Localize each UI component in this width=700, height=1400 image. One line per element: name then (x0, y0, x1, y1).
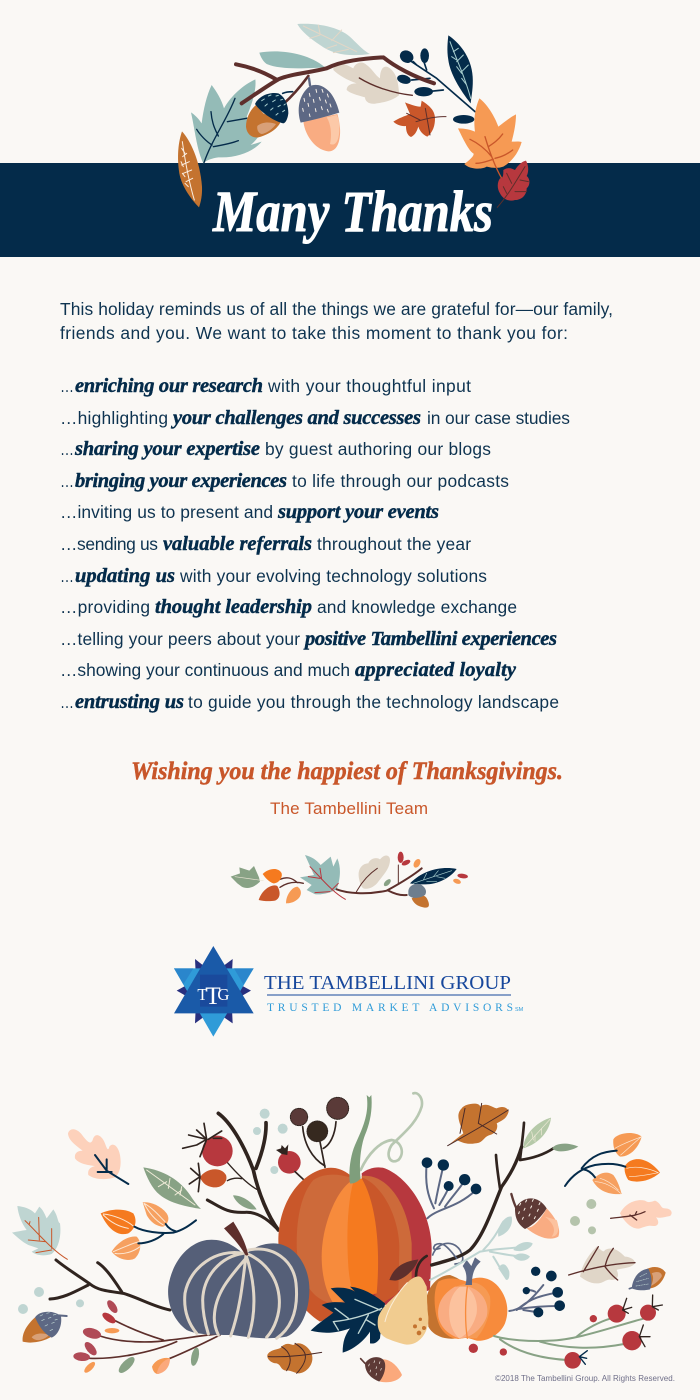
list of thanks: …providing (60, 597, 150, 617)
logo name: THE TAMBELLINI GROUP (264, 972, 511, 994)
signature: The Tambellini Team (270, 799, 428, 818)
list of thanks: in our case studies (427, 408, 570, 428)
list of thanks: to guide you through the technology landscape (188, 692, 559, 712)
list of thanks: to life through our podcasts (292, 471, 509, 491)
logo (174, 946, 524, 1037)
logo star mark: T (197, 985, 208, 1004)
intro text (60, 299, 613, 343)
logo star mark: G (217, 985, 229, 1004)
leaf, pear and small pumpkin (311, 1243, 507, 1353)
logo star mark: T (205, 982, 221, 1010)
title: Many Thanks (212, 179, 493, 244)
logo star mark (174, 946, 254, 1037)
list of thanks: throughout the year (317, 534, 471, 554)
list of thanks: sharing your expertise (74, 438, 260, 460)
small branch divider (231, 852, 468, 908)
list of thanks: …sending us (60, 534, 158, 554)
list of thanks: your challenges and successes (170, 407, 421, 429)
harvest illustration right (361, 1103, 672, 1382)
list of thanks: … (60, 439, 74, 459)
list of thanks: enriching our research (75, 375, 263, 397)
list of thanks: …showing your continuous and much (60, 660, 350, 680)
list of thanks: entrusting us (75, 691, 184, 713)
list of thanks: … (60, 471, 74, 491)
closing wish: Wishing you the happiest of Thanksgivings. (131, 758, 563, 785)
intro text: friends and you. We want to take this moment to thank you for: (60, 323, 568, 343)
list of thanks: appreciated loyalty (355, 659, 517, 681)
list of thanks: and knowledge exchange (317, 597, 517, 617)
list of thanks: with your thoughtful input (267, 376, 471, 396)
list of thanks: updating us (75, 565, 175, 587)
list of thanks: thought leadership (155, 596, 312, 618)
list of thanks: support your events (277, 501, 439, 523)
wreath illustration (178, 24, 529, 207)
list of thanks: …inviting us to present and (60, 502, 273, 522)
banner (0, 163, 700, 257)
list of thanks: with your evolving technology solutions (179, 566, 487, 586)
list of thanks: bringing your experiences (75, 470, 287, 492)
list of thanks: … (60, 692, 74, 712)
list of thanks: …telling your peers about your (60, 629, 300, 649)
blue pumpkin (168, 1222, 309, 1338)
harvest illustration left (12, 1097, 349, 1375)
intro text: This holiday reminds us of all the things we are grateful for—our family, (60, 299, 613, 319)
logo tagline: TRUSTED MARKET ADVISORS (267, 1002, 513, 1014)
list of thanks: valuable referrals (163, 533, 312, 555)
list of thanks: … (60, 376, 74, 396)
list of thanks: by guest authoring our blogs (265, 439, 491, 459)
list of thanks (60, 375, 570, 713)
large orange pumpkin (278, 1093, 432, 1322)
service mark: SM (515, 1007, 524, 1013)
list of thanks: …highlighting (60, 408, 168, 428)
copyright: ©2018 The Tambellini Group. All Rights Reserved. (495, 1374, 675, 1383)
list of thanks: positive Tambellini experiences (303, 628, 557, 650)
list of thanks: … (60, 566, 74, 586)
